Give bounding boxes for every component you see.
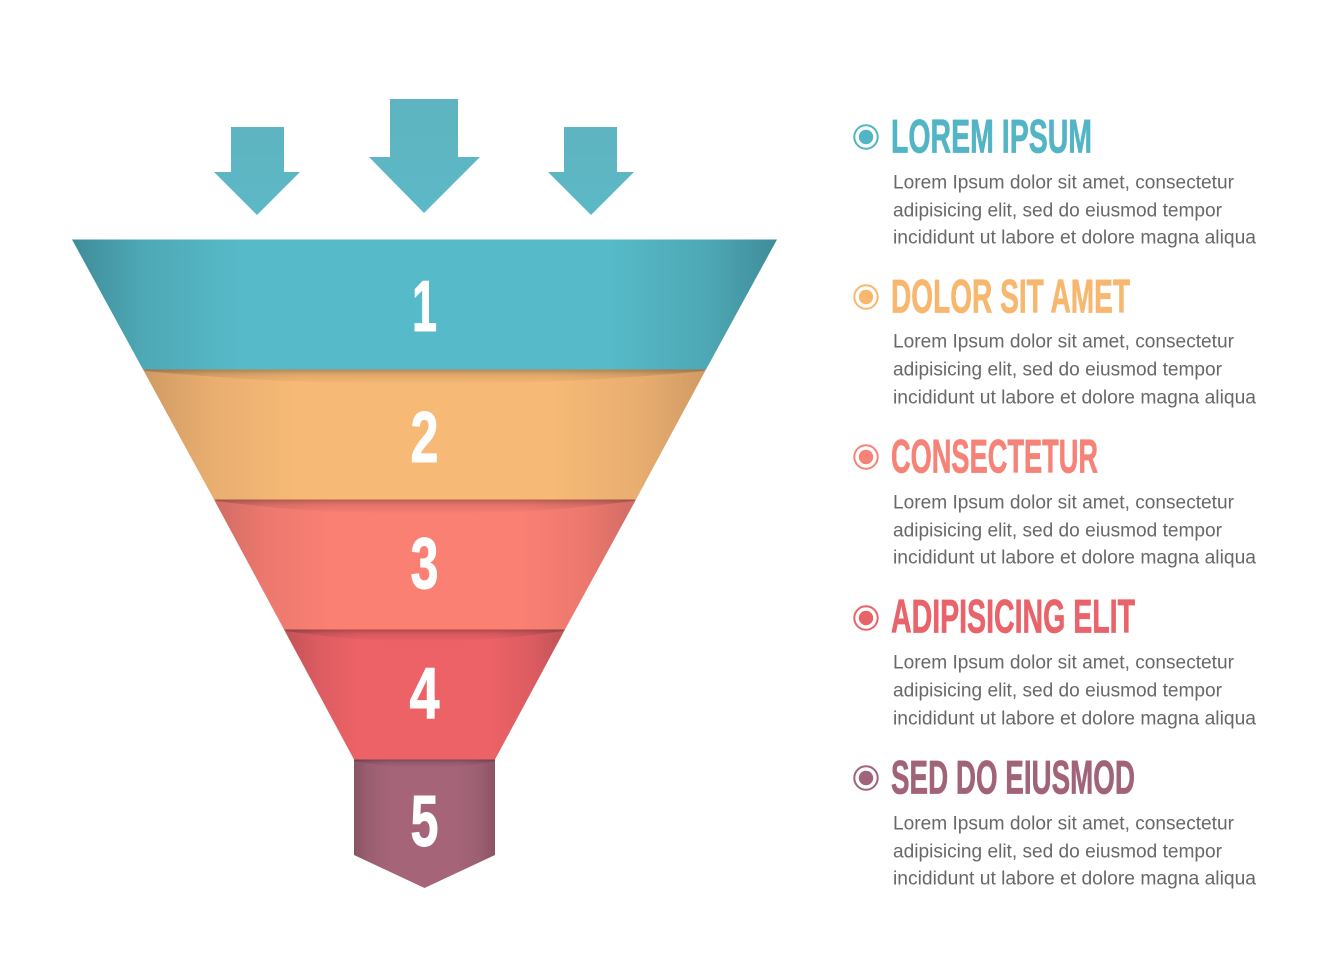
text block 4 [893, 653, 1256, 730]
icon: bullet 1 [854, 125, 878, 149]
text block 5: incididunt ut labore et dolore magna aliqua [893, 869, 1256, 890]
list item 3 [854, 430, 1256, 569]
arrow: right [548, 127, 634, 215]
icon: bullet 2 [854, 285, 878, 309]
text block 4: incididunt ut labore et dolore magna aliqua [893, 709, 1256, 730]
text block 5: adipisicing elit, sed do eiusmod tempor [893, 842, 1223, 863]
text block 1: adipisicing elit, sed do eiusmod tempor [893, 201, 1223, 222]
text block 4: Lorem Ipsum dolor sit amet, consectetur [893, 653, 1235, 674]
funnel band 5 spout [354, 760, 495, 888]
text block 1 [893, 173, 1256, 249]
icon: bullet 4 [854, 606, 878, 630]
arrow: left [214, 127, 300, 215]
funnel band 5 spout: 5 [410, 782, 438, 862]
text block 3: incididunt ut labore et dolore magna aliqua [893, 548, 1256, 569]
heading 3: CONSECTETUR [891, 430, 1098, 482]
text block 3 [893, 493, 1256, 569]
arrow: centre [369, 99, 480, 213]
heading 1: LOREM IPSUM [891, 110, 1092, 162]
heading 5: SED DO EIUSMOD [891, 750, 1135, 804]
funnel band 4: 4 [410, 654, 440, 734]
icon: bullet 5 [854, 766, 878, 790]
funnel band 1 [72, 240, 777, 370]
funnel [72, 240, 777, 888]
funnel band 1: 1 [412, 267, 437, 347]
text block 2: adipisicing elit, sed do eiusmod tempor [893, 360, 1223, 381]
funnel band 2 [143, 370, 706, 500]
text block 3: adipisicing elit, sed do eiusmod tempor [893, 521, 1223, 542]
funnel band 3: 3 [410, 524, 438, 604]
text block 1: incididunt ut labore et dolore magna aliqua [893, 228, 1256, 249]
funnel band 2: 2 [410, 398, 438, 478]
text block 5: Lorem Ipsum dolor sit amet, consectetur [893, 814, 1235, 835]
text block 2: Lorem Ipsum dolor sit amet, consectetur [893, 332, 1235, 353]
text block 3: Lorem Ipsum dolor sit amet, consectetur [893, 493, 1235, 514]
list item 5 [854, 750, 1256, 890]
list item 4 [854, 590, 1256, 730]
text block 4: adipisicing elit, sed do eiusmod tempor [893, 681, 1223, 702]
icon: bullet 3 [854, 445, 878, 469]
list item 2 [854, 270, 1256, 409]
funnel band 3 [214, 500, 636, 630]
text block 1: Lorem Ipsum dolor sit amet, consectetur [893, 173, 1235, 194]
funnel band 4 [284, 630, 565, 760]
heading 4: ADIPISICING ELIT [891, 590, 1135, 642]
text block 2: incididunt ut labore et dolore magna aliqua [893, 388, 1256, 409]
heading 2: DOLOR SIT AMET [891, 270, 1130, 322]
list item 1 [854, 110, 1256, 249]
text block 5 [893, 814, 1256, 890]
text block 2 [893, 332, 1256, 409]
arrows pointing into funnel [214, 99, 634, 215]
